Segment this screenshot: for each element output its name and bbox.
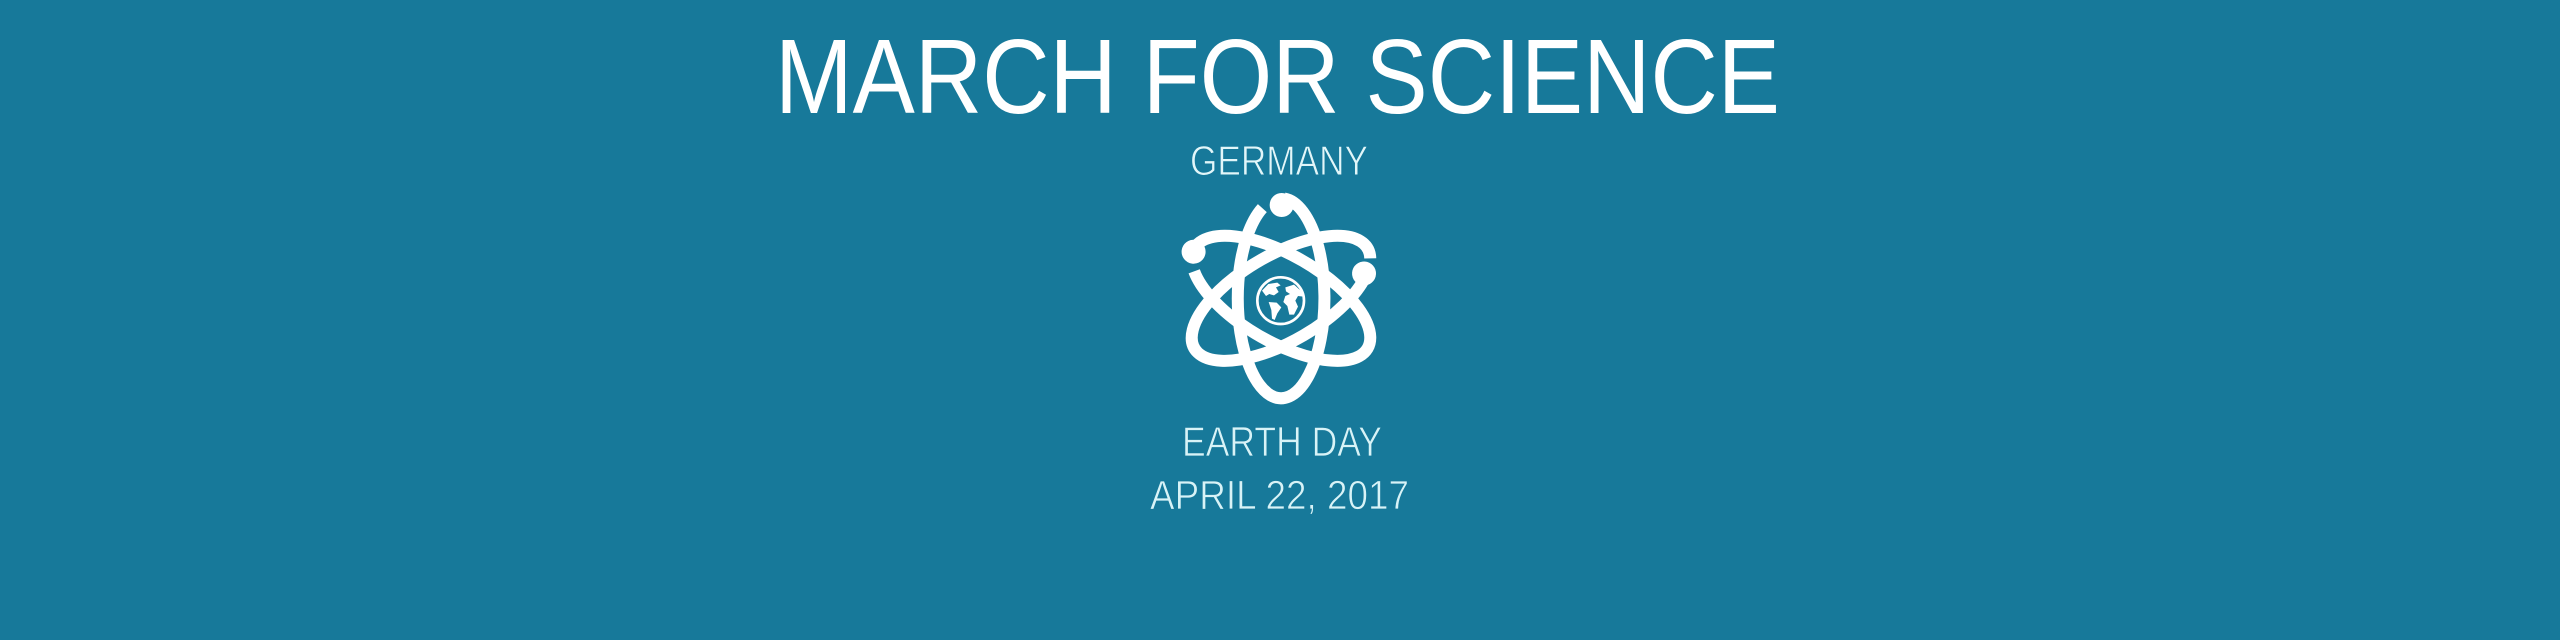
- icon: earth globe: [1257, 277, 1304, 324]
- icon: atom with globe: [1163, 193, 1389, 398]
- icon: orbit tilted left with electron: [1163, 205, 1389, 386]
- text: event day: EARTH DAY: [1182, 418, 1382, 465]
- icon: vertical orbit with electron: [1238, 193, 1324, 398]
- subtitle: country: GERMANY: [1190, 137, 1368, 184]
- icon: orbit tilted right with electron: [1173, 211, 1389, 386]
- title: MARCH FOR SCIENCE: [775, 18, 1780, 136]
- text: event date: APRIL 22, 2017: [1150, 472, 1409, 518]
